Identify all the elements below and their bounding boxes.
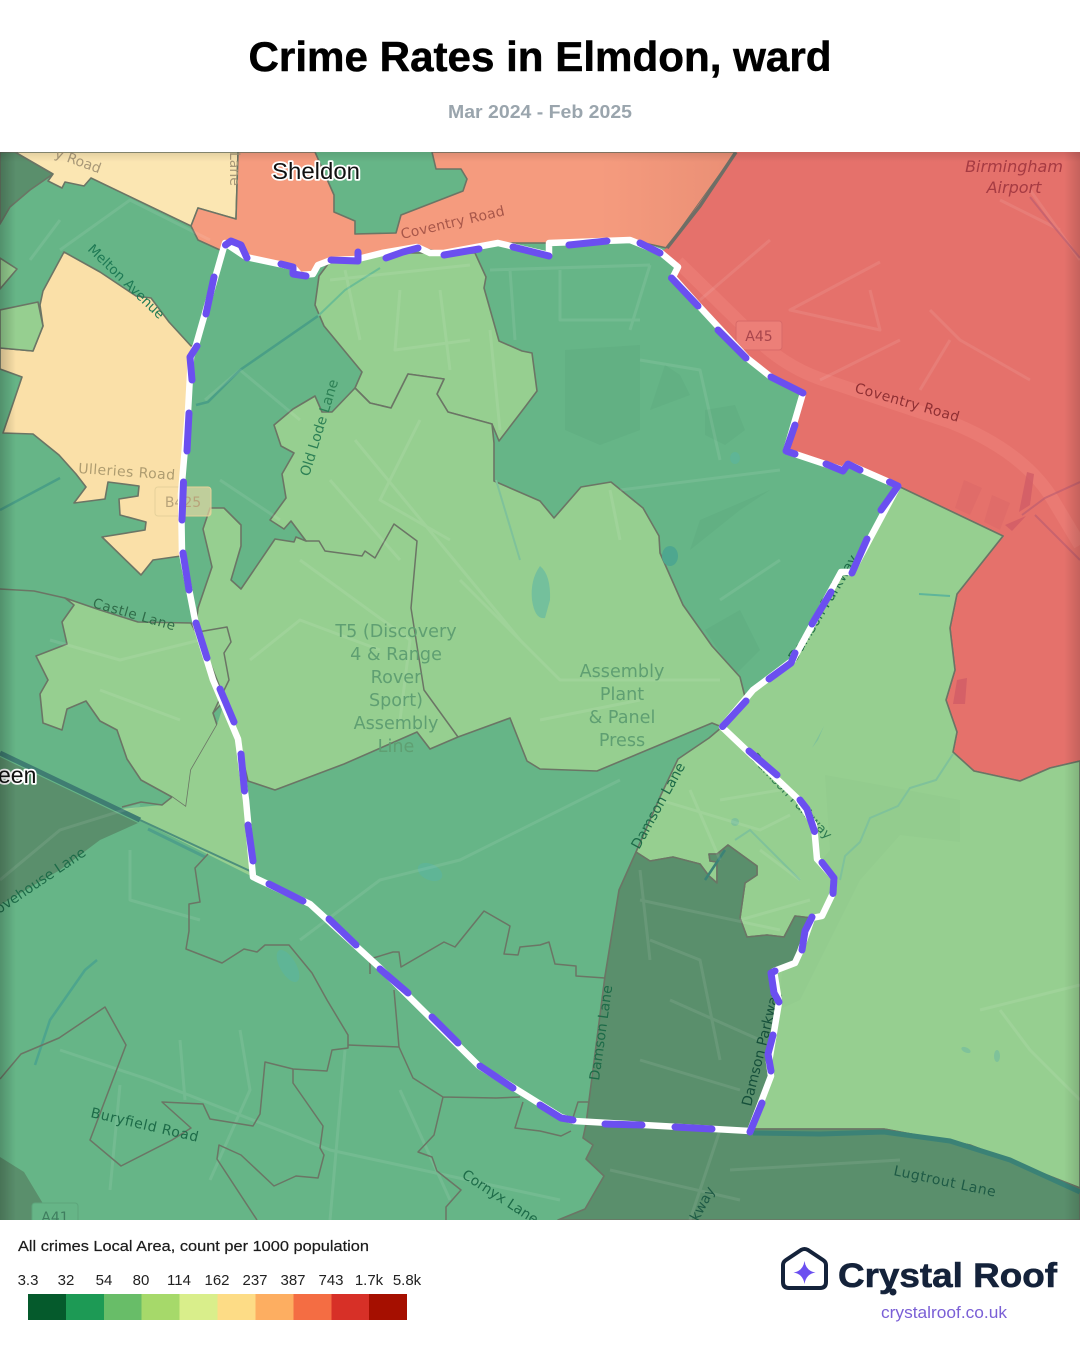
railway line <box>0 753 140 820</box>
label: T5 plant: Rover <box>371 668 422 688</box>
water bodies <box>272 452 1000 1062</box>
logo: Crystal Roof <box>783 1249 1058 1322</box>
label: Assembly Plant: & Panel <box>589 708 655 728</box>
map labels <box>0 146 1063 1232</box>
label: Damson Parkway north: Damson Parkway <box>786 552 862 664</box>
label: Coventry Road west: Coventry Road <box>399 203 506 243</box>
region: dark green by railway <box>0 757 138 905</box>
legend tick values: 80 <box>133 1272 149 1289</box>
region: cream west <box>0 252 196 575</box>
legend heading: All crimes Local Area, count per 1000 population <box>18 1239 369 1255</box>
title: Crime Rates in Elmdon, ward <box>248 33 832 80</box>
legend tick values: 1.7k <box>355 1272 384 1289</box>
logo wordmark: Crystal Roof <box>838 1257 1058 1295</box>
label: Lugtrout Lane: Lugtrout Lane <box>892 1163 997 1201</box>
region: dark green Damson Parkway <box>558 845 1080 1220</box>
legend tick values <box>18 1272 422 1289</box>
region: light green central <box>196 374 745 790</box>
boundaries: southern output areas <box>217 1069 324 1220</box>
label: Assembly Plant: Press <box>599 731 645 751</box>
subtitle: date range: Mar 2024 - Feb 2025 <box>448 101 632 122</box>
canal along Lugtrout Lane <box>753 1132 1080 1192</box>
label: Damson Parkway south: Damson Parkway <box>739 987 784 1108</box>
legend tick values: 114 <box>167 1272 191 1289</box>
region: salmon Sheldon <box>191 152 736 275</box>
boundaries: south-west output areas <box>0 854 348 1166</box>
label: A45 road shield: A45 <box>745 329 773 345</box>
legend tick values: 387 <box>280 1272 306 1289</box>
label: Damson Lane north: Damson Lane <box>629 760 689 852</box>
label: Birmingham Airport: Birmingham <box>965 157 1063 176</box>
label: A41 road shield: A41 <box>41 1210 69 1226</box>
legend tick values: 54 <box>96 1272 112 1289</box>
legend tick values: 32 <box>58 1272 74 1289</box>
region: red Birmingham Airport <box>660 152 1080 781</box>
icon: house with star <box>783 1249 826 1288</box>
patches: subtle woodland in north-east green zone <box>565 345 770 675</box>
label: Ulleries Road: Ulleries Road <box>78 461 176 484</box>
label: Assembly Plant: Assembly <box>580 662 664 682</box>
label: Sheldon: Sheldon <box>272 158 360 184</box>
label: Birmingham Airport: Airport <box>986 178 1042 197</box>
boundaries: near Damson Lane <box>515 1102 588 1136</box>
label: T5 plant: Line <box>378 737 414 757</box>
region: dark green south-west curve <box>0 1157 42 1220</box>
legend tick values: 3.3 <box>18 1272 38 1289</box>
label: Road north-west: y Road <box>53 146 103 177</box>
patches: subtle field strip in south-east <box>778 775 960 1010</box>
legend <box>18 1239 422 1320</box>
label: Damson Lane south: Damson Lane <box>587 984 616 1082</box>
label: Cornyx Lane: Cornyx Lane <box>459 1167 541 1228</box>
roads: faint street network <box>0 200 1080 1220</box>
road: faint airport roads <box>700 190 1080 390</box>
legend tick values: 162 <box>204 1272 230 1289</box>
railway line east <box>140 820 250 871</box>
label: Lane at top: Lane <box>226 152 242 186</box>
boundary lines inside central zone <box>306 524 458 737</box>
streams <box>0 268 953 1065</box>
region: light green west patches <box>0 258 43 351</box>
stream: airport north-east <box>1022 197 1080 560</box>
legend colour scale <box>28 1294 407 1320</box>
boundaries: south central output areas <box>348 990 520 1220</box>
railway trackside band <box>148 829 205 857</box>
region: light green Damson <box>636 727 834 937</box>
label: Melton Avenue: Melton Avenue <box>84 241 167 323</box>
label: Buryfield Road: Buryfield Road <box>89 1105 200 1146</box>
label: Old Lode Lane: Old Lode Lane <box>298 378 342 478</box>
label: A41 road shield <box>32 1203 78 1232</box>
region: light green Castle Lane <box>36 598 225 807</box>
ward boundary: Elmdon <box>181 240 898 1132</box>
region: light green south-east <box>722 486 1080 1188</box>
region: light green triangle by railway <box>122 710 250 876</box>
label: Parkway fragment: kway <box>687 1184 719 1224</box>
label: Birmingham Airport <box>965 157 1063 197</box>
detail: airport apron patches <box>953 472 1034 704</box>
boundary: heavy line at Coventry Road <box>667 152 736 248</box>
website link: crystalroof.co.uk <box>881 1304 1008 1322</box>
label: B425 road shield: B425 <box>165 495 201 511</box>
boundaries: south of ward line <box>370 911 605 978</box>
road: Coventry Road corridor on red <box>678 262 1080 545</box>
label: Assembly Plant: Plant <box>600 685 644 705</box>
region: light green north <box>315 253 537 441</box>
region edge: red and light green boundary <box>898 486 1080 781</box>
label: Damson Parkway east: Damson Parkway <box>747 750 835 843</box>
label: Castle Lane: Castle Lane <box>91 595 177 634</box>
boundary lines near Castle Lane <box>0 589 231 807</box>
label: A45 road shield <box>736 321 782 350</box>
map edge shading <box>0 152 1080 1220</box>
label: T5 plant: 4 & Range <box>350 645 442 665</box>
legend tick values: 743 <box>318 1272 344 1289</box>
label: B425 road shield <box>155 487 211 516</box>
label: T5 plant <box>334 622 457 757</box>
legend tick values: 5.8k <box>393 1272 422 1289</box>
label: T5 plant: T5 (Discovery <box>334 622 457 642</box>
region: cream north-west <box>15 152 238 226</box>
legend tick values: 237 <box>242 1272 268 1289</box>
label: T5 plant: Sport) <box>369 691 423 711</box>
label: Coventry Road east: Coventry Road <box>853 380 961 426</box>
logo key detail <box>890 1288 896 1296</box>
region: dark green north-west corner <box>0 152 53 224</box>
label: Assembly Plant <box>580 662 664 751</box>
label: T5 plant: Assembly <box>354 714 438 734</box>
